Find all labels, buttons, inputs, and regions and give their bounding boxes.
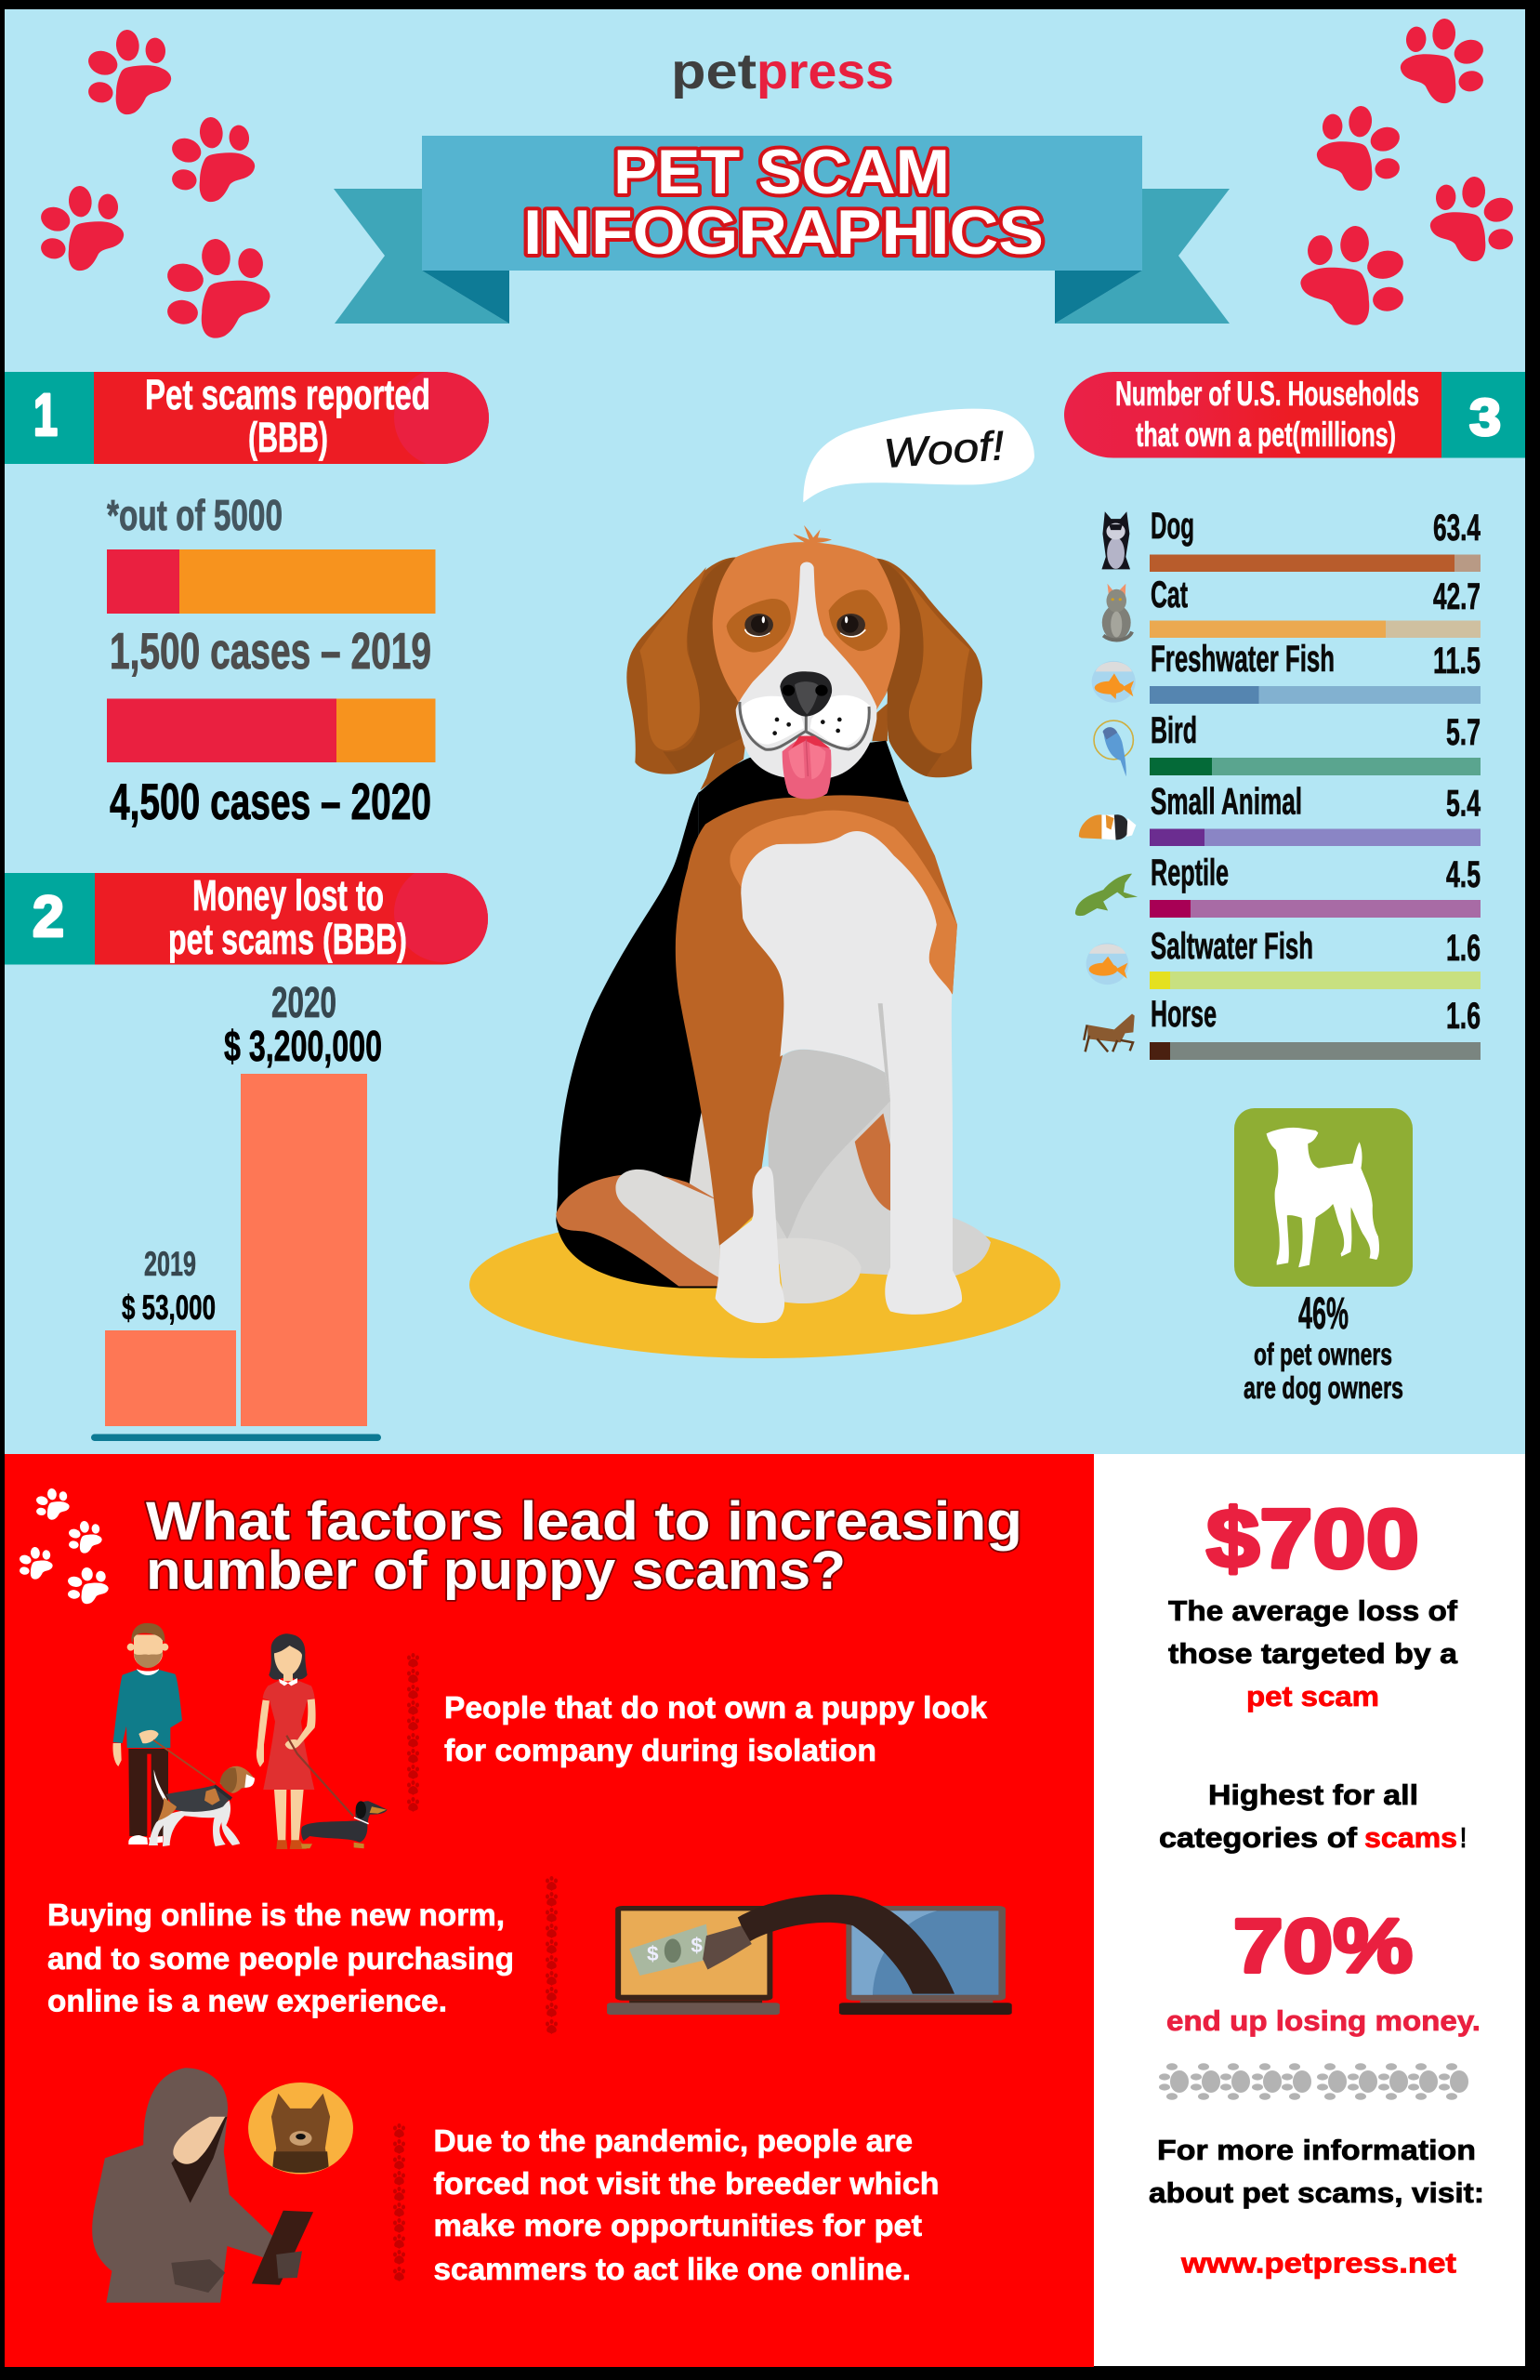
pet icons [1075,511,1138,1051]
text: highest for all categories: scams [1364,1821,1457,1854]
bar chart: money lost [91,978,382,1441]
stat: 700 dollars: $700 [1206,1493,1419,1586]
text: more information: For more information [1157,2134,1476,2166]
title ribbon [334,136,1230,324]
row: reptile: Reptile [1151,853,1229,893]
title text [523,137,1044,268]
stacked bar 2019 [107,549,435,614]
speech bubble: woof: Woof! [882,423,1006,477]
factor text 3 [433,2123,939,2286]
panel: red factors section [5,1454,1094,2367]
row: dog [1150,506,1481,572]
factor text 1 [444,1690,988,1767]
row: cat: Cat [1151,575,1188,615]
man [112,1623,182,1844]
hood interior [171,2117,228,2203]
beagle [149,1766,255,1846]
nose [780,671,832,717]
row: saltwater fish: 1.6 [1446,928,1481,969]
bar chart: money lost: 2019 [144,1245,196,1283]
bar chart: money lost: $ 3,200,000 [224,1022,382,1070]
factor text 1: for company during isolation [444,1733,876,1767]
icon: horse [1084,1013,1135,1051]
illustration: beagle head [626,525,982,809]
stat: 46 percent of pet owners: 46% [1298,1289,1349,1339]
money: $ [647,1942,659,1965]
row: cat [1150,575,1481,638]
factor text 2: and to some people purchasing [47,1941,514,1976]
logo: petpress [671,44,894,99]
section 1 header: Pet scams reported [145,371,430,418]
portrait: amber circle with dog [248,2082,353,2175]
stat: 46 percent of pet owners: are dog owners [1244,1370,1403,1405]
text: more information: about pet scams, visit: [1149,2176,1484,2209]
row: freshwater fish: Freshwater Fish [1151,639,1335,680]
grey paw row [1159,2063,1468,2100]
text: highest for all categories: ! [1460,1821,1467,1854]
row: bird: 5.7 [1446,712,1481,753]
eyes [744,614,865,637]
text: highest for all categories: Highest for all [1208,1778,1418,1811]
bar chart: money lost: $ 53,000 [122,1289,216,1327]
row: small animal: Small Animal [1151,781,1302,822]
illustration: couple walking dogs [112,1623,388,1849]
bar chart: money lost: 2020 [271,978,336,1026]
factor text 3: Due to the pandemic, people are [433,2123,913,2158]
whisker dots [772,718,842,735]
text: website: www.petpress.net [1180,2246,1456,2280]
money: $ [691,1934,703,1957]
section 1 header [5,368,493,467]
row: horse [1150,994,1481,1060]
label 2020 cases: 4,500 cases – 2020 [110,773,431,830]
face [713,542,900,778]
row: small animal [1150,781,1481,846]
logo: petpress: pet [671,44,757,99]
title text: INFOGRAPHICS [523,197,1044,268]
factor text 2: Buying online is the new norm, [47,1897,505,1932]
paw divider 1 [407,1653,419,1812]
section 3 header: 3 [1469,388,1501,446]
dachshund [301,1801,388,1848]
factor text 1: People that do not own a puppy look [444,1690,988,1725]
yellow ground ellipse [469,1211,1060,1358]
paw divider 3 [393,2123,405,2281]
section 1 header: (BBB) [248,414,328,461]
leashes [153,1736,353,1816]
decorative red paws right [1300,18,1517,325]
factor text 2 [47,1897,514,2017]
section 1 header: 1 [33,381,58,448]
row: saltwater fish: Saltwater Fish [1151,926,1313,967]
section 2 header: pet scams (BBB) [168,915,407,963]
paw divider 2 [546,1876,558,2034]
note: out of 5000: *out of 5000 [107,491,283,539]
phone [252,2211,313,2285]
text: highest for all categories: categories of [1159,1821,1358,1854]
row: freshwater fish: 11.5 [1433,641,1481,681]
icon: goldfish bowl [1092,661,1136,703]
title text: PET SCAM [613,137,950,207]
hand [703,1925,752,1970]
icon: husky [1101,511,1130,569]
stat: 46 percent of pet owners: of pet owners [1254,1337,1392,1371]
icon: guinea pig [1079,814,1136,840]
row: dog: 63.4 [1433,508,1481,549]
illustration: hooded scammer [92,2068,353,2303]
icon: goldfish bowl 2 [1086,943,1128,985]
hands [171,2251,302,2293]
icon: bird in ring [1094,721,1133,776]
panel: white stats section [1094,1454,1525,2366]
row: reptile [1150,853,1481,918]
row: bird [1150,710,1481,775]
heading: what factors: number of puppy scams? [146,1540,846,1601]
panel: light blue upper section [5,9,1525,1454]
money [629,1924,710,1976]
mouth line [740,702,869,749]
text: more information [1149,2134,1484,2209]
factor text 2: online is a new experience. [47,1984,447,2017]
row: horse: Horse [1151,994,1217,1035]
text: average loss: The average loss of [1168,1594,1458,1627]
heading: what factors: What factors lead to increasing [146,1491,1022,1552]
text: highest for all categories [1159,1778,1467,1854]
illustration: laptops with stealing arm [607,1895,1012,2015]
pet ownership list [1150,506,1481,1060]
decorative red paws left [37,29,270,338]
section 3 header: that own a pet(millions) [1136,416,1396,454]
stat: 46 percent of pet owners [1244,1289,1403,1405]
stacked bar 2020 [107,699,435,762]
left laptop [607,1906,780,2015]
section 2 header [5,873,488,965]
row: saltwater fish [1150,926,1481,989]
speech bubble: woof [803,409,1034,502]
section 2 header: 2 [33,885,64,949]
text: average loss: pet scam [1246,1680,1379,1712]
face [173,2117,225,2164]
coat [92,2068,276,2303]
hair tuft [793,525,832,543]
row: freshwater fish [1150,639,1481,704]
white paws by heading [19,1488,109,1604]
icon: lizard [1075,874,1138,916]
text: end up losing money: end up losing money. [1166,2004,1481,2037]
heading: what factors [146,1491,1022,1601]
illustration: beagle body [556,748,991,1323]
arm [738,1895,954,1994]
row: small animal: 5.4 [1446,783,1481,824]
right ear [874,559,982,777]
section 2 header: Money lost to [192,871,384,919]
stat: 70 percent: 70% [1233,1904,1413,1989]
right laptop [839,1906,1012,2015]
tongue [783,736,831,800]
label 2019 cases: 1,500 cases – 2019 [110,622,431,680]
factor text 3: make more opportunities for pet [433,2208,922,2242]
text: average loss: those targeted by a [1168,1637,1458,1670]
icon card: dog silhouette [1234,1108,1413,1287]
row: reptile: 4.5 [1446,854,1481,895]
section 3 header [1064,372,1525,457]
icon: cat [1102,584,1132,640]
row: horse: 1.6 [1446,996,1481,1037]
factor text 3: scammers to act like one online. [433,2252,911,2286]
text: average loss [1168,1594,1458,1712]
left ear [626,557,744,774]
row: dog: Dog [1151,506,1194,547]
woman [257,1633,316,1849]
row: bird: Bird [1151,710,1197,751]
logo: petpress: press [757,44,894,99]
factor text 3: forced not visit the breeder which [433,2166,939,2201]
row: cat: 42.7 [1433,576,1481,617]
